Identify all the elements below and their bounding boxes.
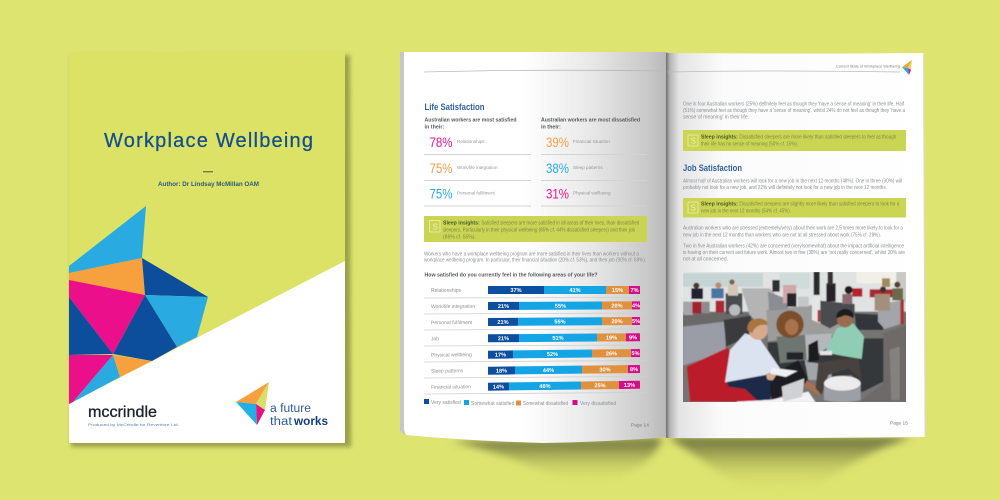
callout text: sleepers. Particularly in their physical wellbeing (85% cf. 44% dissatisfied sleepers) and their job — [443, 228, 635, 234]
row: physical wellbeing: 26% — [606, 351, 617, 357]
panel: right page — [666, 53, 925, 438]
callout text: Satisfied sleepers are more satisfied in all areas of their lives, than dissatisfied — [481, 220, 640, 226]
row: work life integration: 4% — [632, 303, 640, 309]
background people — [691, 288, 703, 299]
icon: S badge — [688, 202, 698, 213]
row: personal fulfilment: 21% — [497, 320, 509, 326]
row: work life integration: 21% — [498, 304, 509, 310]
row: personal fulfilment: 5% — [632, 319, 640, 325]
mccrindle logo: Produced by McCrindle for Reventure Ltd. — [88, 422, 179, 427]
stat: sleep patterns: Sleep patterns — [573, 165, 603, 170]
chart legend: Very satisfied — [431, 400, 461, 406]
row: work life integration: Work/life integration — [431, 304, 475, 310]
stat: financial situation: Financial situation — [573, 139, 610, 144]
background furniture — [683, 302, 693, 315]
cover author: Author: Dr Lindsay McMillan OAM — [158, 181, 259, 188]
callout text: Sleep insights: — [701, 202, 739, 208]
row: personal fulfilment — [431, 317, 640, 326]
row: personal fulfilment: 20% — [611, 319, 623, 325]
woman — [777, 335, 807, 363]
page number 14: Page 14 — [631, 422, 649, 428]
text block: artificial intelligence: is having on their current and future work. Almost two in five (38%) are 'not really concerned', whilst 20% are — [683, 250, 905, 256]
row: relationships: 37% — [510, 288, 522, 294]
column heading: most satisfied: in their: — [424, 124, 444, 130]
icon: header logo — [902, 60, 912, 75]
icon: S badge: S — [432, 222, 438, 232]
row: job — [431, 333, 640, 343]
row: sleep patterns: 18% — [496, 368, 507, 375]
text block: sense of meaning: (51%) somewhat feel as though they have a 'sense of meaning', whilst 24% do not feel as though they 'have a — [683, 108, 905, 114]
row: financial situation: Financial situation — [431, 384, 471, 391]
stat: physical wellbeing: 31% — [546, 186, 569, 202]
icon: S badge: S — [691, 136, 696, 146]
text block: sense of meaning: sense of meaning' in their life. — [683, 114, 749, 120]
stat: relationships — [430, 134, 485, 150]
row: physical wellbeing — [431, 349, 640, 359]
row: work life integration: 55% — [555, 304, 566, 310]
booklet shadow — [452, 437, 912, 489]
chart legend: Somewhat dissatisfied — [523, 401, 568, 407]
row: work life integration — [431, 301, 640, 310]
row: job: 51% — [552, 336, 564, 342]
paper and laptop — [770, 368, 798, 377]
stat: work life integration — [430, 160, 498, 176]
stat: financial situation: 39% — [546, 134, 569, 150]
stacked bar chart: satisfaction — [424, 286, 647, 394]
left header rule — [424, 70, 668, 72]
cover white diagonal — [69, 261, 345, 443]
row: relationships: 41% — [569, 288, 581, 294]
row: financial situation: 25% — [594, 383, 606, 389]
text block: job search: Almost half of Australian workers will look for a new job in the next 12 months (48%). One in three (30%) will — [683, 178, 902, 184]
stat: personal fulfilment — [430, 186, 496, 202]
text block: job search: probably not look for a new job, and 22% will definitely not look for a new job in the next 12 months. — [683, 185, 887, 191]
callout: sleep insights meaning — [683, 130, 906, 151]
row: sleep patterns: 30% — [599, 367, 611, 373]
stat: personal fulfilment: Personal fulfilment — [457, 190, 496, 196]
panel: left page — [400, 52, 668, 443]
icon: S badge — [688, 135, 698, 146]
infographic: report cover and open spread — [68, 52, 926, 478]
column heading: most dissatisfied: Australian workers are most dissatisfied — [541, 118, 640, 124]
callout text: Sleep insights: — [701, 134, 739, 140]
row: relationships: Relationships — [431, 288, 462, 294]
stat: personal fulfilment: 75% — [430, 186, 452, 202]
foreground sofas — [683, 322, 726, 366]
callout text: new job in the next 12 months (54% cf. 45%). — [701, 208, 791, 214]
row: work life integration: 20% — [611, 303, 623, 310]
callout: sleep insights left page — [424, 216, 647, 242]
running header: Current State of Workplace Wellbeing — [836, 64, 900, 68]
stat: relationships: 78% — [430, 134, 452, 150]
text block: stress: Australian workers who are stressed (extremely/very) about their work are 2.5 times more likely to look for a — [683, 226, 903, 232]
cover shadow — [71, 55, 351, 447]
mccrindle logo — [88, 404, 179, 427]
text block: workplace wellbeing program: Workers who have a workplace wellbeing program are more satisfied in their lives than workers without a — [424, 252, 639, 258]
stat: sleep patterns: 38% — [546, 160, 569, 176]
row: physical wellbeing: Physical wellbeing — [431, 352, 472, 359]
a future that works logo — [236, 382, 328, 428]
row: physical wellbeing: 5% — [631, 351, 640, 357]
panel: report cover — [69, 52, 345, 443]
cover author — [158, 171, 259, 188]
chart legend — [424, 399, 616, 407]
row: personal fulfilment: Personal fulfilment — [431, 320, 473, 326]
row: physical wellbeing: 52% — [547, 352, 558, 358]
column heading: most satisfied: Australian workers are most satisfied — [424, 118, 516, 124]
stat: physical wellbeing: Physical wellbeing — [573, 190, 611, 196]
column heading: most dissatisfied: in their: — [541, 124, 561, 130]
row: job: 19% — [606, 335, 617, 341]
text block: stress: new job in the next 12 months than workers who are not at all stressed about work (75% cf. 28%). — [683, 232, 881, 238]
cover title: Workplace Wellbeing — [104, 130, 313, 152]
man in white shirt — [727, 375, 773, 402]
chart question: How satisfied do you currently feel in the following areas of your life? — [424, 272, 598, 278]
page number 15: Page 15 — [890, 420, 908, 426]
stat: sleep patterns — [546, 160, 603, 176]
heading: life satisfaction: Life Satisfaction — [424, 102, 484, 112]
chart legend: Very dissatisfied — [580, 401, 616, 407]
icon: S badge: S — [691, 204, 696, 212]
text block: artificial intelligence: not at all concerned. — [683, 256, 728, 262]
row: physical wellbeing: 17% — [495, 353, 506, 359]
chart legend: Somewhat satisfied — [471, 401, 515, 407]
stool — [824, 383, 861, 402]
a future that works logo: a future — [270, 403, 311, 415]
heading: job satisfaction: Job Satisfaction — [683, 163, 742, 173]
stat: physical wellbeing — [546, 186, 611, 202]
row: job: 9% — [629, 335, 637, 341]
row: financial situation — [431, 381, 640, 391]
page stack edge — [400, 52, 407, 436]
row: sleep patterns: 44% — [543, 368, 554, 374]
row: financial situation: 48% — [539, 384, 551, 390]
row: personal fulfilment: 55% — [554, 319, 566, 326]
stat: work life integration: 75% — [430, 160, 452, 176]
text block: artificial intelligence: Two in five Australian workers (42%) are concerned (very/somewhat) about the impact artificial intelligence — [683, 244, 904, 250]
a future that works logo: works — [293, 416, 328, 428]
row: sleep patterns: Sleep patterns — [431, 368, 464, 375]
text block: workplace wellbeing program: workplace wellbeing program. In particular, their financial situation (20% cf. 53%), and their job (90% cf. 68%). — [424, 258, 646, 264]
row: financial situation: 13% — [624, 383, 635, 389]
mccrindle logo: mccrindle — [88, 404, 157, 421]
callout text: (86% cf. 55%). — [443, 234, 476, 240]
stat: relationships: Relationships — [457, 139, 485, 144]
icon: S badge — [430, 220, 440, 232]
stat: financial situation — [546, 134, 610, 150]
right header rule — [668, 71, 900, 72]
man in green shirt — [816, 357, 862, 395]
callout text: their life has no sense of meaning (50% cf. 15%). — [701, 142, 798, 148]
photo: colleagues in lounge — [680, 270, 910, 407]
row: financial situation: 14% — [493, 384, 504, 391]
row: job: 21% — [498, 336, 509, 342]
callout text: Sleep insights: — [443, 220, 481, 226]
cover geometric artwork — [69, 206, 208, 404]
row: job: Job — [431, 336, 439, 342]
text block: sense of meaning: One in four Australian workers (25%) definitely feel as though they 'have a sense of meaning' in their life. Half — [683, 102, 905, 108]
row: relationships: 15% — [612, 288, 623, 294]
callout text: Dissatisfied sleepers are slightly more likely than satisfied sleepers to look for a — [739, 202, 900, 208]
stat: work life integration: Work/life integration — [457, 165, 498, 170]
row: relationships — [431, 286, 640, 294]
a future that works logo: that — [270, 416, 293, 428]
row: sleep patterns — [431, 365, 640, 375]
row: relationships: 7% — [630, 288, 639, 294]
callout: sleep insights job — [683, 198, 906, 218]
callout text: Dissatisfied sleepers are more likely than satisfied sleepers to feel as though — [739, 134, 897, 140]
row: sleep patterns: 8% — [630, 367, 638, 373]
